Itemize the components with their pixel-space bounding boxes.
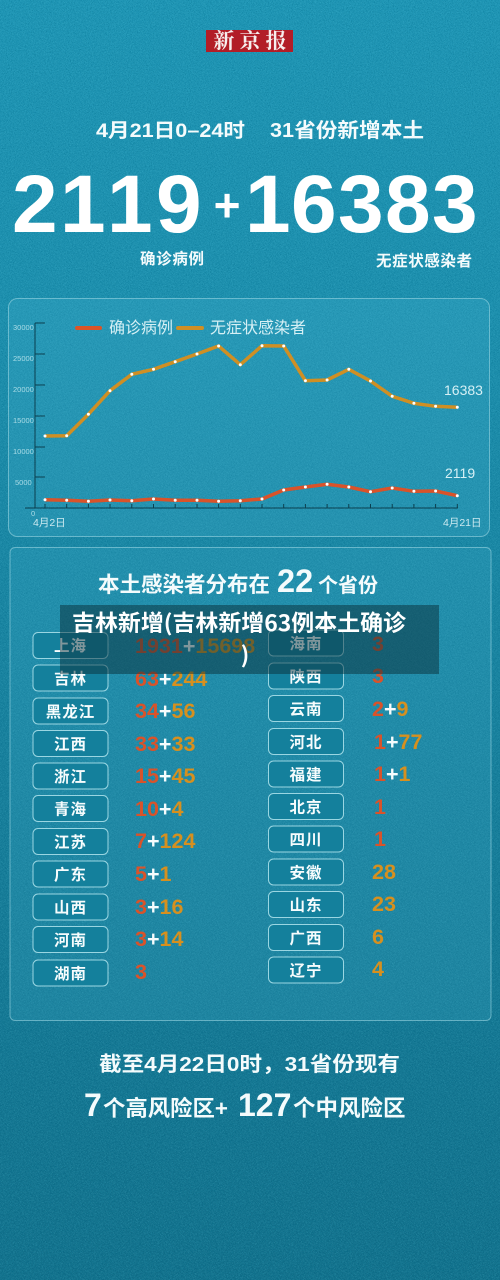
panel heading: 本土感染者分布在	[98, 572, 270, 597]
left column rows	[33, 632, 255, 986]
left column rows: 青海	[54, 800, 87, 818]
right column rows: 2+9	[372, 697, 409, 721]
headline numbers: 2119	[12, 159, 202, 250]
chart axes: 20000	[13, 385, 34, 394]
chart axes: 4月21日	[443, 517, 482, 529]
right column rows: 23	[372, 892, 396, 916]
right column rows: 1	[374, 795, 386, 819]
right column rows: 云南	[289, 700, 323, 718]
chart axes	[13, 323, 482, 529]
left column rows: 63+244	[135, 667, 207, 691]
right column rows: 1+1	[374, 762, 411, 786]
headline label: asymptomatic: 无症状感染者	[376, 251, 472, 270]
end label: 2119: 2119	[445, 465, 475, 481]
left column rows: 7+124	[135, 829, 195, 853]
right column rows: 3	[372, 664, 384, 688]
end label: 16383: 16383	[444, 382, 483, 398]
chart axes: 15000	[13, 416, 34, 425]
right column rows: 安徽	[289, 864, 323, 882]
chart legend: 无症状感染者	[210, 319, 306, 337]
headline label: confirmed: 确诊病例	[140, 249, 204, 268]
chart axes: 0	[31, 509, 35, 518]
left column rows: 33+33	[135, 732, 195, 756]
title overlay banner: 吉林新增(吉林新增63例本土确诊	[72, 606, 407, 638]
left column rows: 3+16	[135, 895, 183, 919]
chart legend	[77, 319, 306, 337]
footer: risk area summary	[84, 1053, 406, 1123]
panel: provincial distribution	[10, 548, 491, 1020]
left column rows: 浙江	[54, 768, 87, 786]
right column rows: 四川	[289, 832, 323, 849]
left column rows: 5+1	[135, 862, 172, 886]
panel heading	[98, 563, 378, 599]
right column rows: 1	[374, 827, 386, 851]
right column rows: 海南	[289, 635, 323, 653]
right column rows: 1+77	[374, 730, 422, 754]
chart axes: 5000	[15, 478, 32, 487]
right column rows: 3	[372, 632, 384, 656]
left column rows: 上海	[54, 637, 87, 655]
headline numbers: +	[214, 179, 240, 231]
line: asymptomatic	[44, 344, 459, 438]
right column rows: 28	[372, 860, 396, 884]
left column rows: 湖南	[54, 965, 87, 983]
chart legend: 确诊病例	[109, 319, 173, 337]
left column rows: 1931+15698	[135, 634, 255, 658]
headline numbers: 16383	[245, 159, 478, 250]
chart axes: 25000	[13, 354, 34, 363]
right column rows	[268, 630, 422, 983]
left column rows: 江西	[54, 736, 87, 754]
heading: date and scope: 31省份新增本土	[270, 119, 424, 142]
left column rows: 34+56	[135, 699, 195, 723]
left column rows: 河南	[54, 932, 87, 950]
left column rows: 江苏	[54, 832, 87, 852]
right column rows: 北京	[289, 798, 323, 816]
right column rows: 福建	[289, 766, 323, 784]
panel heading: 个省份	[318, 574, 378, 597]
right column rows: 陕西	[289, 668, 323, 686]
right column rows: 山东	[289, 896, 323, 914]
left column rows: 吉林	[54, 670, 87, 688]
left column rows: 15+45	[135, 764, 195, 788]
right column rows: 4	[372, 957, 384, 981]
heading: date and scope	[96, 119, 424, 142]
right column rows: 6	[372, 925, 384, 949]
right column rows: 辽宁	[289, 961, 323, 980]
right column rows: 河北	[289, 734, 323, 752]
left column rows: 广东	[54, 865, 87, 884]
right column rows: 广西	[289, 930, 323, 948]
logo: 新京报: 新京报	[214, 25, 292, 55]
footer: risk area summary: 个中风险区	[293, 1095, 406, 1121]
title overlay banner	[60, 605, 439, 674]
left column rows: 3	[135, 960, 147, 984]
footer: risk area summary: 7	[84, 1087, 102, 1123]
panel: trend chart	[8, 298, 490, 536]
left column rows: 黑龙江	[46, 703, 95, 721]
left column rows: 3+14	[135, 927, 183, 951]
chart axes: 4月2日	[33, 517, 66, 529]
chart axes: 30000	[13, 323, 34, 332]
footer: risk area summary: 截至4月22日0时，31省份现有	[99, 1053, 400, 1076]
chart axes: 10000	[13, 447, 34, 456]
panel heading: 22	[277, 563, 313, 599]
headline numbers	[12, 159, 478, 250]
left column rows: 山西	[54, 899, 87, 917]
left column rows: 10+4	[135, 797, 183, 821]
line: confirmed	[44, 483, 459, 503]
footer: risk area summary: 个高风险区+	[103, 1096, 228, 1121]
heading: date and scope: 4月21日0–24时	[96, 120, 245, 142]
title overlay banner: )	[241, 638, 249, 670]
footer: risk area summary: 127	[238, 1087, 291, 1123]
